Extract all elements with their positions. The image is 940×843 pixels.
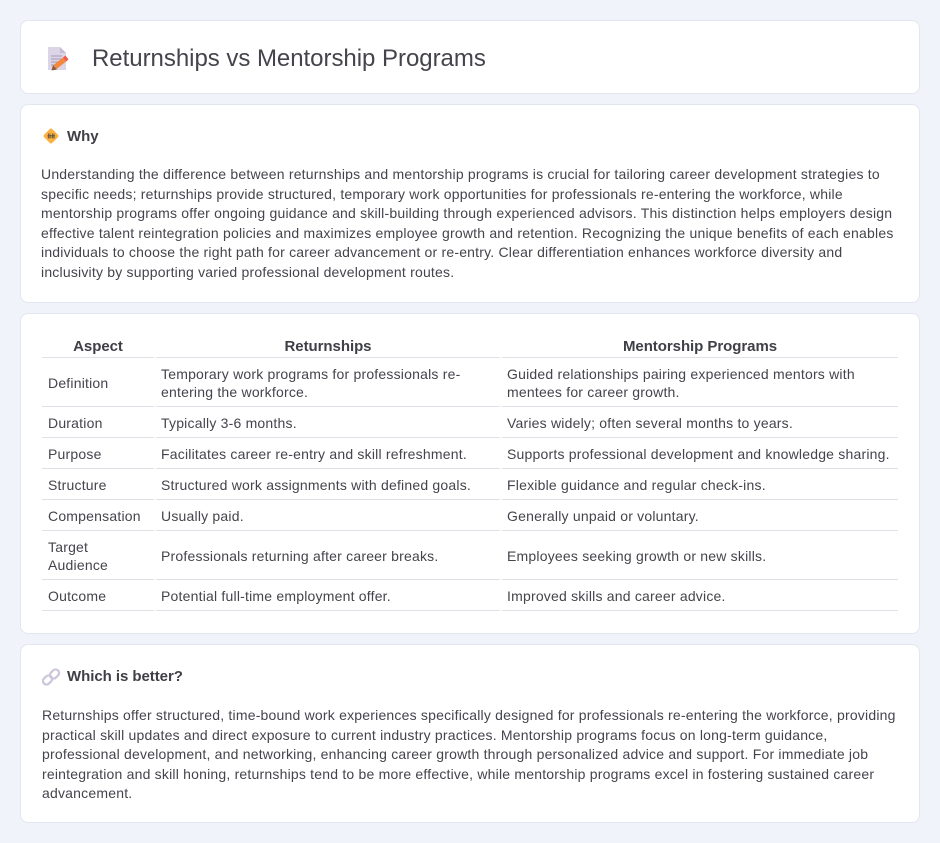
- row: outcome: Outcome: [48, 588, 106, 604]
- row: target audience: Professionals returning after career breaks.: [161, 548, 438, 564]
- row: duration: Duration: [48, 415, 103, 431]
- panel: which is better: [20, 644, 920, 823]
- panel: header: [20, 20, 920, 94]
- row: definition: mentees for career growth.: [507, 384, 680, 400]
- row: target audience: Employees seeking growth or new skills.: [507, 548, 766, 564]
- row: duration: Varies widely; often several months to years.: [507, 415, 793, 431]
- row: duration: [42, 415, 898, 438]
- row: definition: [42, 366, 898, 407]
- text block: verdict: [42, 707, 896, 801]
- text block: why: effective talent reintegration policies and maximizes employee growth and retention. Recognizing the unique benefits of each enables: [41, 225, 894, 241]
- text block: verdict: advancement.: [42, 785, 132, 801]
- text block: verdict: reintegration and skill honing, returnships tend to be more effective, while mentorship programs excel in fostering sustained career: [42, 766, 874, 782]
- table header row: [42, 338, 898, 358]
- row: duration: Typically 3-6 months.: [161, 415, 297, 431]
- row: outcome: Improved skills and career advice.: [507, 588, 726, 604]
- title: Returnships vs Mentorship Programs: [92, 45, 486, 72]
- icon: yellow diamond sign: [44, 128, 58, 144]
- text block: why: mentorship programs offer ongoing guidance and skill-building through experienced advisors. This distinction helps employers design: [41, 205, 892, 221]
- text block: why: [41, 166, 894, 280]
- row: target audience: [42, 539, 898, 580]
- icon: chain link: [42, 668, 60, 686]
- row: target audience: Target: [48, 539, 88, 555]
- panel: why: [20, 104, 920, 303]
- table header row: Mentorship Programs: [623, 338, 777, 355]
- row: compensation: Usually paid.: [161, 508, 244, 524]
- heading: why: Why: [67, 128, 99, 145]
- text block: why: Understanding the difference between returnships and mentorship programs is crucial for tailoring career development strategies to: [41, 166, 880, 182]
- row: compensation: Generally unpaid or voluntary.: [507, 508, 699, 524]
- row: purpose: [42, 446, 898, 469]
- table header row: Aspect: [73, 338, 123, 355]
- row: structure: [42, 477, 898, 500]
- row: definition: Guided relationships pairing experienced mentors with: [507, 366, 855, 382]
- text block: why: inclusivity by supporting varied professional development routes.: [41, 264, 454, 280]
- text block: verdict: Returnships offer structured, time-bound work experiences specifically designed for professionals re-entering the workforce, providing: [42, 707, 896, 723]
- row: purpose: Facilitates career re-entry and skill refreshment.: [161, 446, 467, 462]
- row: structure: Structure: [48, 477, 107, 493]
- row: outcome: [42, 588, 898, 611]
- row: compensation: [42, 508, 898, 531]
- row: definition: Temporary work programs for professionals re-: [161, 366, 460, 382]
- row: definition: Definition: [48, 375, 108, 391]
- row: structure: Flexible guidance and regular check-ins.: [507, 477, 766, 493]
- table header row: Returnships: [285, 338, 371, 355]
- text block: verdict: practical skill updates and direct exposure to current industry practices. Mentorship programs focus on long-term guidance,: [42, 727, 827, 743]
- row: target audience: Audience: [48, 557, 108, 573]
- row: definition: entering the workforce.: [161, 384, 308, 400]
- text block: why: specific needs; returnships provide structured, temporary work opportunities for professionals re-entering the workforce, while: [41, 186, 843, 202]
- text block: why: individuals to choose the right path for career advancement or re-entry. Clear differentiation enhances workforce diversity and: [41, 244, 842, 260]
- row: outcome: Potential full-time employment offer.: [161, 588, 391, 604]
- row: compensation: Compensation: [48, 508, 141, 524]
- row: structure: Structured work assignments with defined goals.: [161, 477, 471, 493]
- text block: verdict: professional development, and networking, enhancing career growth through personalized advice and support. For immediate job: [42, 746, 868, 762]
- icon: document with pencil: [48, 47, 68, 70]
- row: purpose: Purpose: [48, 446, 102, 462]
- row: purpose: Supports professional development and knowledge sharing.: [507, 446, 890, 462]
- heading: which is better: Which is better?: [67, 668, 183, 685]
- panel: comparison table: [20, 313, 920, 634]
